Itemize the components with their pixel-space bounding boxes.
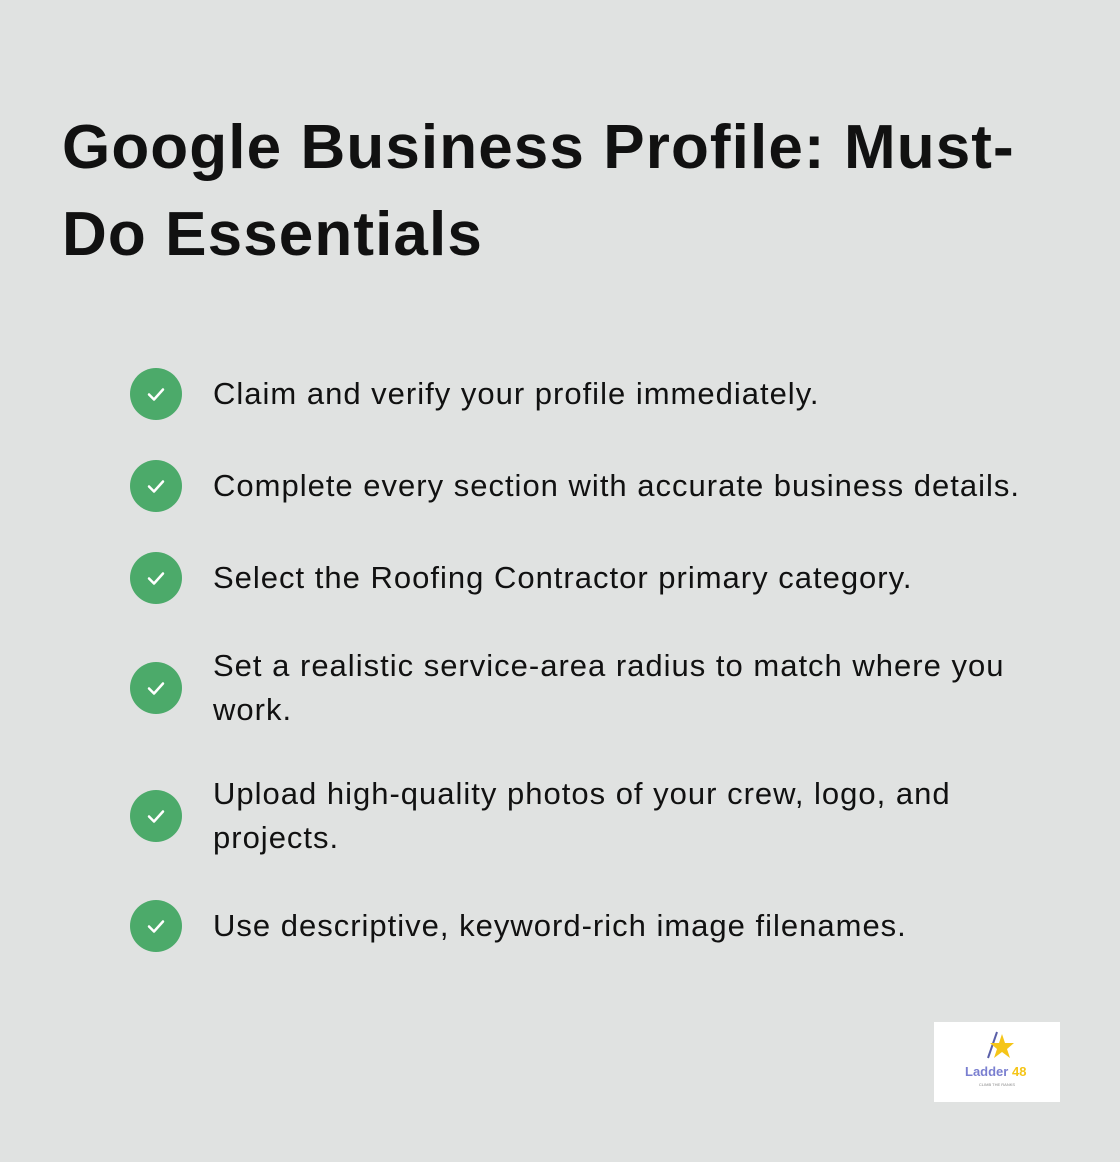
icon: check	[130, 662, 182, 714]
logo	[934, 1022, 1060, 1102]
icon: check	[130, 460, 182, 512]
text: Set a realistic service-area radius to match where you	[213, 648, 1004, 683]
icon: check	[130, 900, 182, 952]
text: Select the Roofing Contractor primary category.	[213, 560, 912, 595]
text	[213, 648, 1004, 727]
logo: CLIMB THE RANKS	[979, 1082, 1015, 1087]
item 1	[130, 368, 820, 420]
logo: Ladder 48	[965, 1064, 1026, 1079]
text: Claim and verify your profile immediately.	[213, 376, 820, 411]
text	[213, 776, 951, 855]
item 4	[130, 648, 1004, 727]
item 6	[130, 900, 907, 952]
title: Google Business Profile: Must-Do Essentials	[62, 113, 1015, 269]
icon: check	[130, 368, 182, 420]
text: Use descriptive, keyword-rich image filenames.	[213, 908, 907, 943]
icon: check	[130, 790, 182, 842]
item 2	[130, 460, 1020, 512]
text: work.	[213, 692, 292, 727]
item 5	[130, 776, 951, 855]
text: Complete every section with accurate business details.	[213, 468, 1020, 503]
text: Upload high-quality photos of your crew, logo, and	[213, 776, 951, 811]
icon: check	[130, 552, 182, 604]
text: projects.	[213, 820, 339, 855]
item 3	[130, 552, 912, 604]
